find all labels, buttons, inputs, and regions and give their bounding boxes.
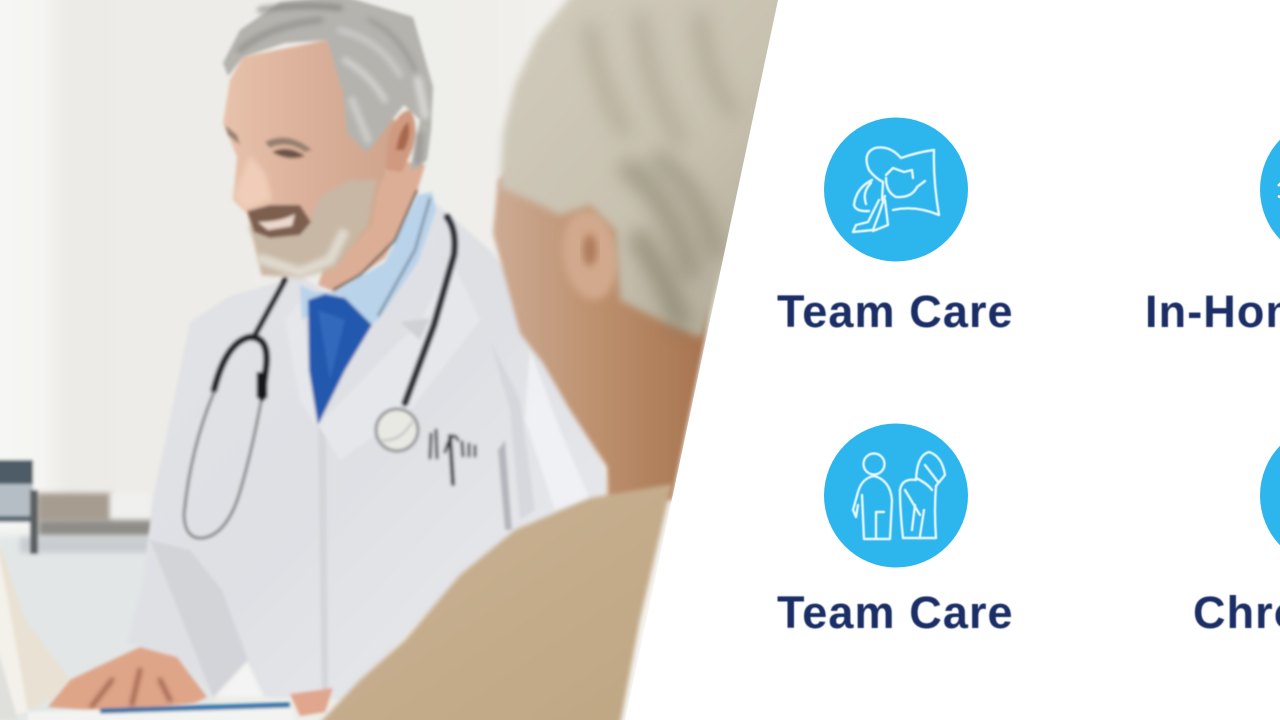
- lower left: patient arm, hands and tablet: [0, 530, 333, 720]
- doctor's neck: [318, 160, 425, 292]
- service: Team Care (top): [777, 118, 1014, 337]
- icon: in-home care circle: [1260, 118, 1280, 262]
- nose: [236, 158, 272, 210]
- doctor's shirt: [300, 192, 436, 330]
- icon: chronic care circle: [1260, 424, 1280, 568]
- panel: care services: [777, 118, 1280, 638]
- doctor's head: [223, 0, 433, 278]
- label: Team Care: Team Care: [777, 286, 1014, 337]
- clinic background: [0, 0, 713, 720]
- patient's garment: [318, 484, 672, 720]
- service: Chronic Care (cropped): [1193, 424, 1280, 638]
- face: [223, 40, 395, 275]
- icon: caregiver with patient: [824, 118, 968, 262]
- doctor: [0, 0, 608, 720]
- patient's ear: [563, 210, 618, 302]
- patient: [318, 0, 800, 720]
- hair: [223, 0, 433, 172]
- doctor's tie: [308, 294, 372, 425]
- pens in pocket: [430, 430, 475, 484]
- doctor's lab coat: [127, 195, 608, 700]
- service: Team Care (bottom): [777, 424, 1014, 638]
- eye and brow: [265, 138, 312, 152]
- stethoscope: [184, 217, 455, 538]
- icon: two people: [824, 424, 968, 568]
- patient's neck and face: [490, 174, 711, 503]
- service: In-Home Care (cropped): [1145, 118, 1280, 337]
- ear: [386, 110, 416, 172]
- patient's hair: [500, 0, 800, 338]
- label: Team Care: Team Care: [777, 587, 1014, 638]
- beard: [248, 180, 377, 278]
- photo: doctor with patient: [0, 0, 800, 720]
